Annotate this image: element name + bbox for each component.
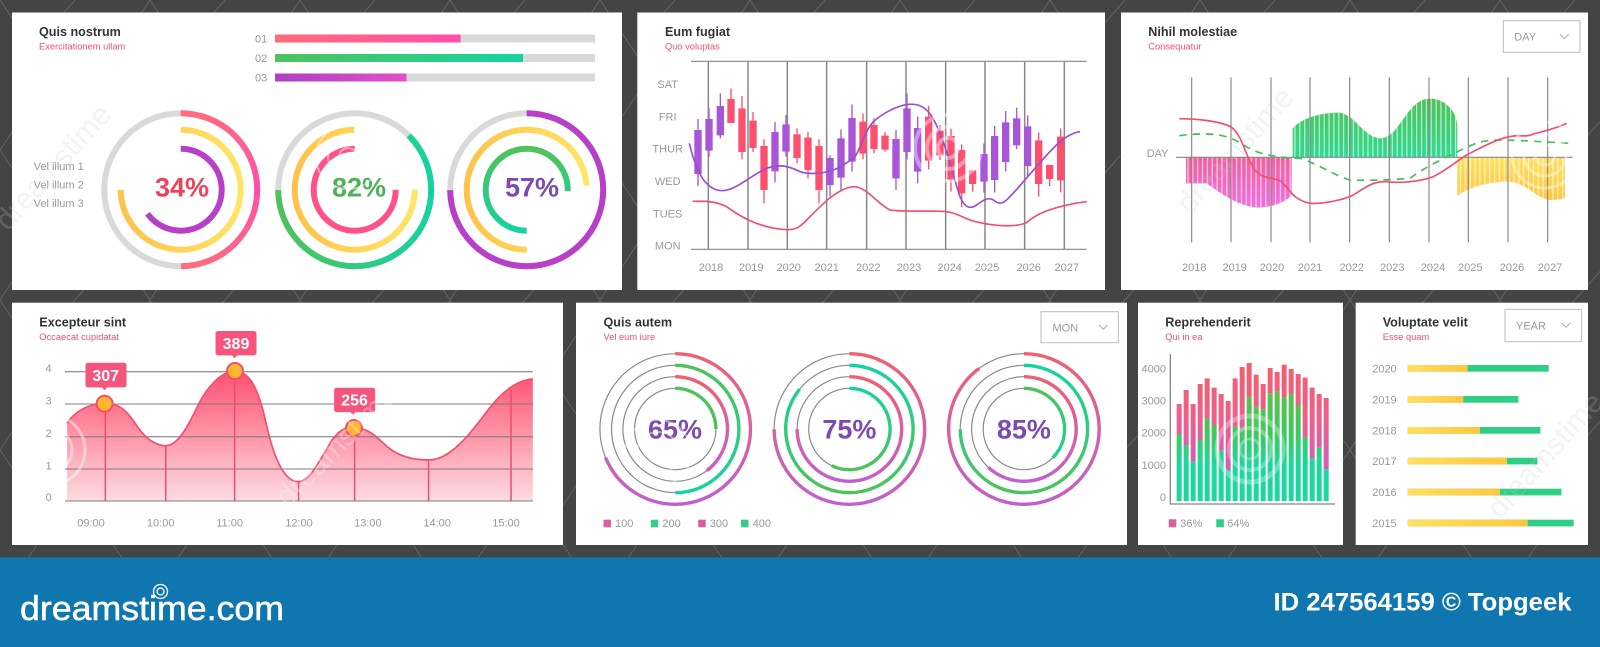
concentric rings 75% [774, 354, 925, 504]
year axis labels: 2024 [1421, 262, 1445, 274]
watermark spiral [316, 125, 380, 189]
legend: 36% 64%: 36% [1180, 518, 1203, 530]
concentric rings 65% [600, 354, 750, 504]
progress bars 01-03 [255, 34, 595, 84]
panel: Quis autem [576, 303, 1127, 545]
horizontal stacked bars 2015-2020: 2016 [1372, 487, 1397, 499]
panel: Voluptate velit [1356, 303, 1600, 545]
heading: Nihil molestiae: Consequatur [1148, 42, 1202, 52]
watermark spiral [625, 420, 691, 486]
watermark spiral [1512, 122, 1578, 188]
heading: Quis nostrum: Exercitationem ullam [39, 42, 126, 52]
y axis labels [46, 363, 52, 504]
dropdown: YEAR [1505, 309, 1582, 342]
heading: Voluptate velit [1383, 316, 1469, 342]
heading: Voluptate velit: Esse quam [1383, 332, 1429, 342]
heading: Quis autem: Vel eum iure [604, 332, 655, 342]
progress bars 01-03: 02 [255, 53, 267, 65]
y axis labels: 1 [46, 460, 52, 472]
watermark spiral [1217, 416, 1283, 482]
y axis labels: 2000 [1142, 428, 1166, 440]
time axis labels [77, 518, 520, 530]
year axis labels: 2024 [937, 262, 962, 274]
panel: Reprehenderit [1138, 303, 1343, 545]
panel: Nihil molestiae [1121, 12, 1588, 290]
heading: Eum fugiat: Quo voluptas [665, 42, 720, 52]
horizontal stacked bars 2015-2020: 2015 [1372, 518, 1397, 530]
heading: Reprehenderit [1165, 316, 1251, 342]
radial chart 82% [278, 113, 431, 266]
progress bars 01-03: 03 [255, 72, 267, 84]
concentric rings 65%: 65% [648, 414, 702, 444]
year axis labels: 2022 [1339, 262, 1364, 274]
y axis labels: 2 [46, 428, 52, 440]
legend: 100 200 300 400: 400 [753, 518, 771, 530]
heading: Excepteur sint [39, 316, 127, 342]
callout: 389 [216, 331, 256, 379]
weekday axis labels: WED [655, 176, 681, 188]
legend: 100 200 300 400: 200 [662, 518, 681, 530]
horizontal stacked bars 2015-2020: 2019 [1372, 394, 1397, 406]
heading: Eum fugiat: Eum fugiat [665, 25, 731, 39]
time axis labels: 09:00 [77, 518, 105, 530]
y axis labels: 1000 [1142, 460, 1166, 472]
y axis labels [1142, 363, 1166, 504]
horizontal stacked bars 2015-2020 [1372, 363, 1574, 530]
radial chart 34% [104, 113, 257, 266]
dropdown: DAY [1503, 21, 1580, 52]
time axis labels: 14:00 [423, 518, 451, 530]
y axis labels: 3000 [1142, 395, 1166, 407]
year axis labels: 2018 [1182, 262, 1207, 274]
heading: Voluptate velit: Voluptate velit [1383, 316, 1469, 330]
watermark text: dreamstime [270, 379, 404, 513]
heading: Reprehenderit: Reprehenderit [1165, 316, 1251, 330]
radial chart 82%: 82% [332, 173, 386, 203]
weekday axis labels: MON [655, 241, 681, 253]
year axis labels: 2027 [1054, 262, 1079, 274]
legend: 36% 64% [1169, 518, 1250, 530]
dropdown: MON: MON [1052, 323, 1078, 335]
ring legend labels: Vel illum 2 [34, 180, 84, 192]
label: DAY axis: DAY [1147, 148, 1169, 160]
ring legend labels: Vel illum 1 [34, 161, 84, 173]
candlestick chart with trend lines [689, 61, 1087, 249]
dropdown: YEAR: YEAR [1516, 320, 1546, 332]
dropdown: DAY: DAY [1514, 32, 1537, 44]
heading: Quis autem [604, 316, 672, 342]
weekday axis labels: THUR [652, 144, 683, 156]
callout: 256: 256 [341, 393, 368, 410]
radial chart 57% [450, 113, 603, 266]
year axis labels: 2023 [897, 262, 921, 274]
weekday axis labels: TUES [653, 208, 682, 220]
year axis labels: 2022 [856, 262, 881, 274]
image credit: ID 247564159 © Topgeek [1274, 589, 1572, 617]
year axis labels [1182, 262, 1562, 274]
legend: 36% 64%: 64% [1227, 518, 1250, 530]
icon: spiral logo [154, 584, 168, 598]
year axis labels: 2021 [814, 262, 839, 274]
heading: Quis nostrum: Quis nostrum [39, 25, 121, 39]
callout: 307: 307 [92, 368, 119, 385]
year axis labels: 2021 [1298, 262, 1322, 274]
ring legend labels: Vel illum 3 [34, 198, 84, 210]
heading: Nihil molestiae [1148, 25, 1237, 52]
heading: Eum fugiat [665, 25, 731, 52]
year axis labels: 2020 [1260, 262, 1284, 274]
concentric rings 85% [949, 354, 1099, 504]
watermark spiral [915, 115, 981, 181]
radial chart 34%: 34% [155, 173, 209, 203]
heading: Excepteur sint: Excepteur sint [39, 316, 127, 330]
horizontal stacked bars 2015-2020: 2017 [1372, 456, 1397, 468]
time axis labels: 15:00 [492, 518, 520, 530]
year axis labels [699, 262, 1079, 274]
y axis labels: 0 [46, 492, 52, 504]
year axis labels: 2019 [1222, 262, 1247, 274]
concentric rings 75%: 75% [822, 414, 876, 444]
weekday axis labels [652, 79, 683, 253]
legend: 100 200 300 400 [604, 518, 771, 530]
striped area chart with trend lines [1176, 77, 1573, 242]
heading: Reprehenderit: Qui in ea [1165, 332, 1203, 342]
heading: Quis nostrum [39, 25, 126, 52]
time axis labels: 11:00 [216, 518, 243, 530]
legend: 100 200 300 400: 100 [615, 518, 633, 530]
time axis labels: 13:00 [354, 518, 382, 530]
weekday axis labels: FRI [659, 112, 677, 124]
time axis labels: 10:00 [147, 518, 174, 530]
callout: 307 [86, 363, 126, 412]
panel: Quis nostrum [0, 12, 622, 290]
callout: 389: 389 [223, 336, 249, 353]
stacked bar chart [1170, 354, 1335, 504]
y axis labels: 0 [1160, 492, 1166, 504]
watermark spiral [15, 415, 85, 485]
year axis labels: 2027 [1538, 262, 1562, 274]
heading: Excepteur sint: Occaecat cupidatat [39, 332, 119, 342]
year axis labels: 2023 [1380, 262, 1405, 274]
heading: Nihil molestiae: Nihil molestiae [1148, 25, 1237, 39]
horizontal stacked bars 2015-2020: 2020 [1372, 363, 1397, 375]
year axis labels: 2018 [699, 262, 723, 274]
legend: 100 200 300 400: 300 [710, 518, 728, 530]
y axis labels: 3 [46, 396, 52, 408]
progress bars 01-03: 01 [255, 34, 267, 46]
year axis labels: 2026 [1500, 262, 1524, 274]
y axis labels: 4000 [1142, 363, 1166, 375]
heading: Quis autem: Quis autem [604, 316, 672, 330]
horizontal stacked bars 2015-2020: 2018 [1372, 425, 1397, 437]
panel: Eum fugiat [637, 12, 1105, 290]
footer band [0, 557, 1600, 647]
year axis labels: 2025 [975, 262, 999, 274]
time axis labels: 12:00 [285, 518, 313, 530]
logo text: dreamstime.com [20, 590, 284, 628]
area chart [65, 371, 533, 501]
y axis labels: 4 [46, 363, 52, 375]
year axis labels: 2019 [739, 262, 764, 274]
concentric rings 85%: 85% [997, 414, 1051, 444]
callout: 256 [334, 388, 375, 436]
dropdown: MON [1041, 312, 1118, 343]
year axis labels: 2025 [1458, 262, 1483, 274]
radial chart 57%: 57% [505, 173, 559, 203]
year axis labels: 2026 [1016, 262, 1041, 274]
panel: Excepteur sint [12, 303, 563, 545]
year axis labels: 2020 [776, 262, 801, 274]
weekday axis labels: SAT [657, 79, 678, 91]
ring legend labels [34, 161, 84, 210]
watermark text: dreamstime [1171, 81, 1300, 220]
